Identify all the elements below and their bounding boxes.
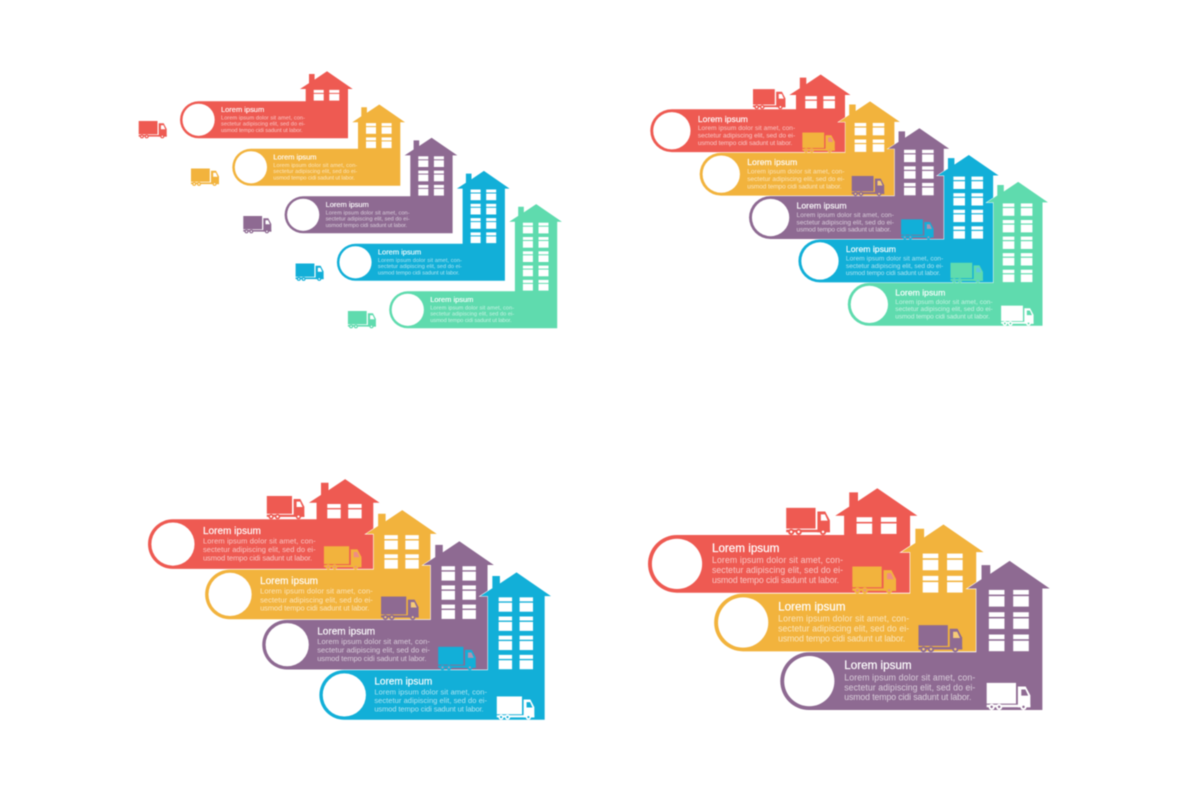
text block: Lorem ipsum dolor sit amet, con- <box>747 169 845 176</box>
truck icon <box>267 496 304 519</box>
text block <box>317 637 430 663</box>
truck icon <box>243 216 271 233</box>
text block: Lorem ipsum dolor sit amet, con- <box>326 210 410 216</box>
truck icon <box>901 219 934 240</box>
step 3: purple building <box>243 138 457 233</box>
text block: Lorem ipsum dolor sit amet, con- <box>260 587 373 596</box>
text block: usmod tempo cidi sadunt ut labor. <box>273 176 355 182</box>
text block: sectetur adipiscing elit, sed do ei- <box>317 646 430 655</box>
text block: sectetur adipiscing elit, sed do ei- <box>378 264 462 270</box>
truck icon <box>786 508 830 535</box>
text block: usmod tempo cidi sadunt ut labor. <box>221 128 303 134</box>
text block: usmod tempo cidi sadunt ut labor. <box>203 553 312 562</box>
heading: Lorem ipsum <box>221 105 264 114</box>
truck icon <box>852 567 896 594</box>
step 2: yellow house <box>191 104 405 186</box>
text block: Lorem ipsum dolor sit amet, con- <box>378 258 462 264</box>
text block: usmod tempo cidi sadunt ut labor. <box>326 223 408 229</box>
text block: sectetur adipiscing elit, sed do ei- <box>778 624 909 634</box>
white truck icon <box>987 683 1030 710</box>
text block <box>797 212 894 234</box>
text block <box>747 169 845 190</box>
text block <box>430 305 514 324</box>
text block: usmod tempo cidi sadunt ut labor. <box>430 318 512 324</box>
step 4: blue building <box>296 171 510 281</box>
text block: Lorem ipsum dolor sit amet, con- <box>203 536 316 545</box>
text block: Lorem ipsum dolor sit amet, con- <box>317 637 430 646</box>
text block: usmod tempo cidi sadunt ut labor. <box>844 692 971 702</box>
step 4: blue building <box>798 155 999 282</box>
heading: Lorem ipsum <box>374 677 432 688</box>
text block <box>260 587 373 613</box>
text block <box>374 687 488 713</box>
text block <box>778 614 909 644</box>
text block: Lorem ipsum dolor sit amet, con- <box>374 687 488 696</box>
heading: Lorem ipsum <box>430 295 473 304</box>
text block: usmod tempo cidi sadunt ut labor. <box>317 654 427 663</box>
white truck icon <box>497 696 534 720</box>
heading: Lorem ipsum <box>317 626 375 637</box>
text block: sectetur adipiscing elit, sed do ei- <box>844 682 975 692</box>
truck icon <box>296 264 324 281</box>
text block <box>378 258 462 276</box>
step 1: red house <box>148 479 380 569</box>
truck icon <box>324 546 361 570</box>
text block: sectetur adipiscing elit, sed do ei- <box>797 219 894 226</box>
step 2: yellow house <box>205 510 437 619</box>
text block: sectetur adipiscing elit, sed do ei- <box>895 306 993 313</box>
text block <box>326 210 410 229</box>
text block: sectetur adipiscing elit, sed do ei- <box>846 263 943 270</box>
text block: usmod tempo cidi sadunt ut labor. <box>698 140 792 147</box>
text block: usmod tempo cidi sadunt ut labor. <box>895 313 990 320</box>
heading: Lorem ipsum <box>747 157 797 167</box>
text block <box>203 536 316 562</box>
truck icon <box>753 89 785 109</box>
text block: sectetur adipiscing elit, sed do ei- <box>712 565 843 575</box>
step 3: purple building <box>780 561 1050 710</box>
text block: usmod tempo cidi sadunt ut labor. <box>778 634 905 644</box>
text block: usmod tempo cidi sadunt ut labor. <box>374 704 484 713</box>
truck icon <box>191 168 219 186</box>
text block: Lorem ipsum dolor sit amet, con- <box>895 299 993 306</box>
text block: usmod tempo cidi sadunt ut labor. <box>378 271 460 277</box>
text block: sectetur adipiscing elit, sed do ei- <box>260 595 373 604</box>
heading: Lorem ipsum <box>712 542 779 555</box>
step 5: green building <box>348 204 562 328</box>
text block: sectetur adipiscing elit, sed do ei- <box>374 696 488 705</box>
text block: Lorem ipsum dolor sit amet, con- <box>797 212 894 219</box>
heading: Lorem ipsum <box>895 287 945 297</box>
step 4: blue building <box>319 572 551 720</box>
text block: sectetur adipiscing elit, sed do ei- <box>430 312 514 318</box>
text block: sectetur adipiscing elit, sed do ei- <box>221 122 305 128</box>
heading: Lorem ipsum <box>203 526 261 537</box>
text block: sectetur adipiscing elit, sed do ei- <box>203 545 316 554</box>
text block: Lorem ipsum dolor sit amet, con- <box>430 305 514 311</box>
text block: usmod tempo cidi sadunt ut labor. <box>260 604 369 613</box>
panel: three steps stacked <box>648 488 1050 710</box>
heading: Lorem ipsum <box>844 659 912 672</box>
text block: Lorem ipsum dolor sit amet, con- <box>273 163 357 169</box>
text block: Lorem ipsum dolor sit amet, con- <box>712 555 843 565</box>
text block: sectetur adipiscing elit, sed do ei- <box>698 133 795 140</box>
text block: sectetur adipiscing elit, sed do ei- <box>747 176 845 183</box>
text block <box>846 255 943 277</box>
text block <box>273 163 357 182</box>
text block: Lorem ipsum dolor sit amet, con- <box>698 125 795 132</box>
text block <box>895 299 993 320</box>
truck icon <box>381 597 419 620</box>
text block: Lorem ipsum dolor sit amet, con- <box>844 672 975 682</box>
truck icon <box>348 311 376 328</box>
truck icon <box>950 263 983 283</box>
truck icon <box>802 133 835 153</box>
step 2: yellow house <box>700 101 900 196</box>
truck icon <box>139 121 167 138</box>
heading: Lorem ipsum <box>378 248 421 257</box>
panel: four steps stacked <box>148 479 551 720</box>
text block <box>712 555 843 585</box>
text block: sectetur adipiscing elit, sed do ei- <box>273 169 357 175</box>
text block: usmod tempo cidi sadunt ut labor. <box>846 270 941 277</box>
heading: Lorem ipsum <box>326 200 369 209</box>
text block <box>221 115 305 134</box>
text block: usmod tempo cidi sadunt ut labor. <box>712 575 839 585</box>
truck icon <box>438 647 476 670</box>
heading: Lorem ipsum <box>778 601 845 614</box>
text block: Lorem ipsum dolor sit amet, con- <box>778 614 909 624</box>
heading: Lorem ipsum <box>698 114 748 124</box>
panel: five steps with trucks outside <box>139 71 562 328</box>
step 1: red house <box>648 488 917 593</box>
step 1: red house <box>139 71 353 138</box>
panel: five steps stacked <box>650 75 1048 326</box>
heading: Lorem ipsum <box>273 153 316 162</box>
step 1: red house <box>650 75 850 152</box>
truck icon <box>919 625 962 652</box>
text block: usmod tempo cidi sadunt ut labor. <box>747 183 842 190</box>
truck icon <box>852 176 884 196</box>
step 3: purple building <box>749 128 949 239</box>
text block <box>698 125 795 147</box>
text block: Lorem ipsum dolor sit amet, con- <box>846 255 943 262</box>
text block: Lorem ipsum dolor sit amet, con- <box>221 115 305 121</box>
text block: sectetur adipiscing elit, sed do ei- <box>326 217 410 223</box>
white truck icon <box>1001 306 1034 326</box>
text block <box>844 672 975 702</box>
heading: Lorem ipsum <box>797 201 847 211</box>
text block: usmod tempo cidi sadunt ut labor. <box>797 227 891 234</box>
heading: Lorem ipsum <box>260 576 318 587</box>
heading: Lorem ipsum <box>846 244 896 254</box>
step 3: purple building <box>262 541 494 669</box>
step 5: green building <box>848 182 1048 326</box>
step 2: yellow house <box>714 525 984 651</box>
